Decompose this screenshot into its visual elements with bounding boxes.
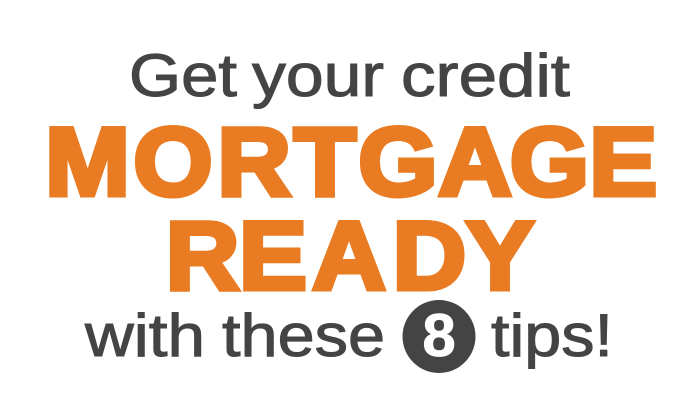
text: with these: with [84, 302, 205, 369]
heading line: Get your credit: Get [129, 42, 237, 109]
text: with these [84, 302, 385, 369]
heading line: Get your credit: your [252, 42, 384, 109]
text: tips!: tips! [491, 302, 613, 369]
heading line: Get your credit [129, 42, 570, 109]
text: with these: these [222, 302, 385, 369]
heading line: Get your credit: credit [401, 42, 570, 109]
heading: MORTGAGE: MORTGAGE [45, 108, 657, 216]
badge: number 8 [402, 300, 476, 373]
heading: READY: READY [166, 202, 534, 311]
badge: number 8: 8 [422, 302, 456, 369]
